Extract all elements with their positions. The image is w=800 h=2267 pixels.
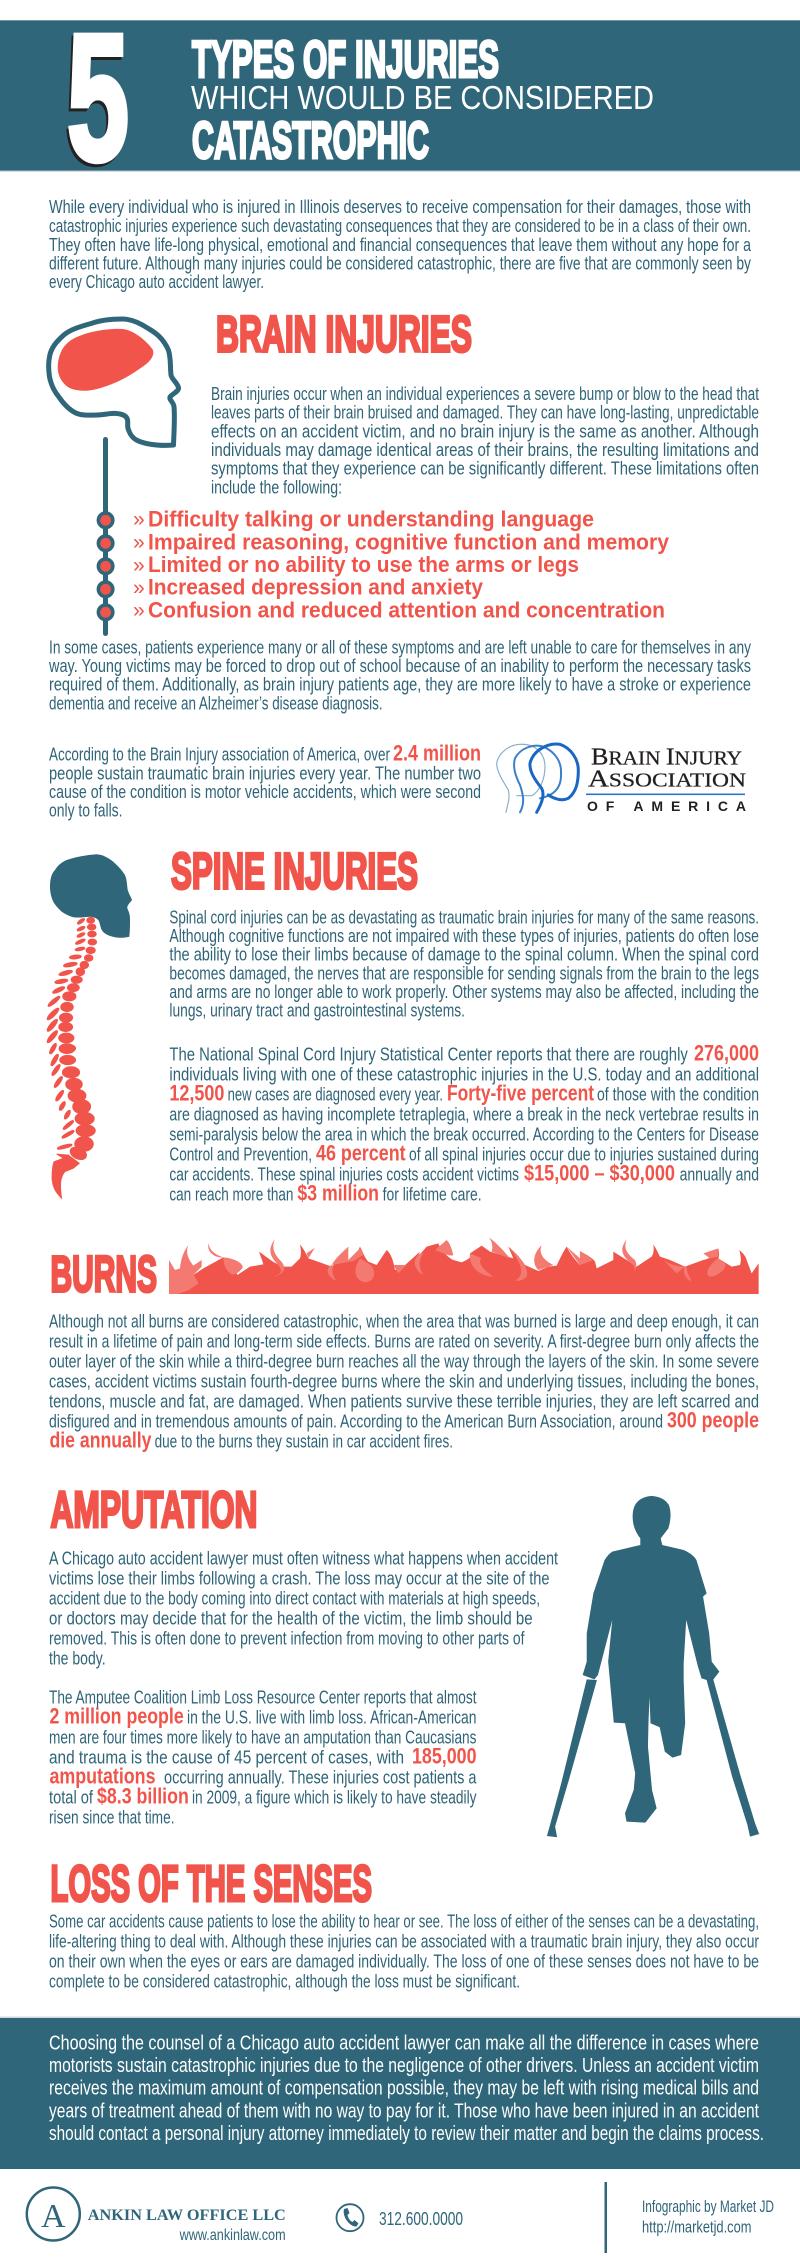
upper vertebrae [46,917,97,1055]
list of brain injury limitations: Increased depression and anxiety [148,575,484,600]
amputation paragraph: removed. This is often done to prevent infection from moving to other parts of [49,1628,525,1649]
brain area [58,329,153,391]
list of brain injury limitations: » [133,508,145,531]
amputation statistics paragraph: $8.3 billion [97,1783,189,1808]
amputation statistics paragraph: The Amputee Coalition Limb Loss Resource Center reports that almost [49,1686,476,1707]
amputation paragraph: A Chicago auto accident lawyer must often witness what happens when accident [49,1548,558,1569]
amputation paragraph [49,1548,558,1669]
paragraph: brain injury statistic [49,741,481,821]
heading: burns: BURNS [50,1246,157,1302]
amputation statistics paragraph: occurring annually. These injuries cost patients a [164,1766,477,1787]
footer logo: Ankin Law Office: A [41,2198,66,2235]
icon: amputee on crutches [547,1496,759,1837]
list of brain injury limitations: » [133,554,145,577]
logo: Brain Injury Association of America: BRAIN INJURY [591,744,742,770]
list of brain injury limitations: Impaired reasoning, cognitive function and memory [148,529,670,554]
spine injuries paragraph [169,906,759,1021]
logo: Brain Injury Association of America: ASSOCIATION [588,766,746,792]
list of brain injury limitations: Difficulty talking or understanding language [148,507,594,532]
logo: Brain Injury Association of America [497,744,746,814]
amputation statistics paragraph: men are four times more likely to have an amputation than Caucasians [49,1726,476,1747]
footer credit [642,2197,774,2237]
brain injuries paragraph: include the following: [211,476,342,497]
paragraph: brain injury statistic: people sustain traumatic brain injuries every year. The number two [49,762,481,783]
amputation paragraph: victims lose their limbs following a crash. The loss may occur at the site of the [49,1568,550,1589]
list of brain injury limitations: Confusion and reduced attention and concentration [148,597,665,622]
paragraph: brain injury statistic: According to the Brain Injury association of America, over [49,744,390,765]
amputation statistics paragraph [49,1686,477,1827]
intro paragraph: every Chicago auto accident lawyer. [49,271,264,292]
heading: spine injuries: SPINE INJURIES [171,842,418,900]
spine statistics paragraph: car accidents. These spinal injuries costs accident victims [169,1164,519,1185]
burns paragraph: die annually [50,1427,152,1452]
amputation statistics paragraph: total of [49,1786,94,1807]
loss of the senses paragraph: complete to be considered catastrophic, although the loss must be significant. [49,1970,520,1991]
paragraph: in some cases [48,636,752,713]
spine statistics paragraph: can reach more than [169,1184,293,1205]
logo: Brain Injury Association of America: OF AMERICA [587,798,746,814]
timeline with bullets [98,437,113,636]
intro paragraph [49,196,752,292]
spine statistics paragraph: 12,500 [169,1081,224,1106]
amputation statistics paragraph: and trauma is the cause of 45 percent of cases, with [49,1746,404,1767]
spine statistics paragraph: 46 percent [316,1141,406,1166]
amputation paragraph: the body. [49,1648,106,1669]
flames banner [169,1237,759,1294]
amputation paragraph: or doctors may decide that for the health of the victim, the limb should be [49,1608,533,1629]
spine statistics paragraph: $3 million [297,1181,379,1206]
spine statistics paragraph [169,1041,759,1206]
burns paragraph [49,1310,759,1452]
spine injuries paragraph: lungs, urinary tract and gastrointestinal systems. [169,1000,465,1021]
heading: brain injuries: BRAIN INJURIES [216,306,472,362]
footer logo: Ankin Law Office: ANKIN LAW OFFICE LLC [88,2207,286,2224]
paragraph: in some cases: dementia and receive an Alzheimer’s disease diagnosis. [49,692,383,713]
heading: loss of the senses: LOSS OF THE SENSES [50,1855,372,1912]
amputation statistics paragraph: in the U.S. live with limb loss. African-American [187,1706,476,1727]
heading: amputation: AMPUTATION [50,1481,258,1538]
amputation statistics paragraph: in 2009, a figure which is likely to have steadily [192,1786,477,1807]
list of brain injury limitations: » [133,576,145,600]
footer logo: Ankin Law Office [27,2188,286,2244]
list of brain injury limitations: » [133,531,145,554]
amputation statistics paragraph: risen since that time. [49,1806,174,1827]
spine statistics paragraph: Control and Prevention, [169,1144,312,1165]
footer phone: 312.600.0000 [379,2208,463,2229]
spine statistics paragraph: 276,000 [694,1041,759,1066]
amputation statistics paragraph: 185,000 [412,1743,476,1768]
spine statistics paragraph: for lifetime care. [383,1184,482,1205]
title line: types of injuries: TYPES OF INJURIES [192,31,499,89]
amputation paragraph: accident due to the body coming into direct contact with materials at high speeds, [49,1588,540,1609]
title line: catastrophic: CATASTROPHIC [192,112,429,170]
burns paragraph: 300 people [667,1407,759,1432]
footer divider [604,2182,607,2253]
paragraph: brain injury statistic: cause of the condition is motor vehicle accidents, which were second [49,781,481,802]
paragraph: brain injury statistic: only to falls. [49,800,122,821]
spine statistics paragraph: $15,000 – $30,000 [524,1161,675,1186]
big numeral 5: 5 [67,0,129,198]
footer logo: Ankin Law Office: www.ankinlaw.com [179,2227,286,2244]
spine statistics paragraph: Forty-five percent [447,1081,595,1106]
title line: which would be considered: WHICH WOULD BE CONSIDERED [191,79,654,116]
list of brain injury limitations: Limited or no ability to use the arms or legs [148,552,579,577]
spine statistics paragraph: The National Spinal Cord Injury Statistical Center reports that there are roughly [169,1044,688,1065]
right crutch [707,1679,759,1837]
spine statistics paragraph: annually and [680,1164,759,1185]
icon: skull and spine [46,854,132,1198]
list of brain injury limitations [133,507,670,622]
footer phone [336,2204,463,2231]
left crutch [547,1679,597,1837]
footer credit: http://marketjd.com [642,2218,752,2237]
header banner [0,0,800,198]
amputation statistics paragraph: amputations [50,1763,156,1788]
closing banner [0,2016,800,2169]
loss of the senses paragraph [49,1910,759,1991]
burns paragraph: due to the burns they sustain in car accident fires. [155,1430,453,1451]
amputation statistics paragraph: 2 million people [50,1703,184,1728]
icon: head with brain [49,319,179,445]
list of brain injury limitations: » [133,599,145,622]
brain injuries paragraph [211,383,759,497]
skull [50,854,132,938]
lower vertebrae and sacrum [50,1044,95,1198]
paragraph: brain injury statistic: 2.4 million [393,741,481,766]
spine statistics paragraph: new cases are diagnosed every year. [228,1084,443,1105]
